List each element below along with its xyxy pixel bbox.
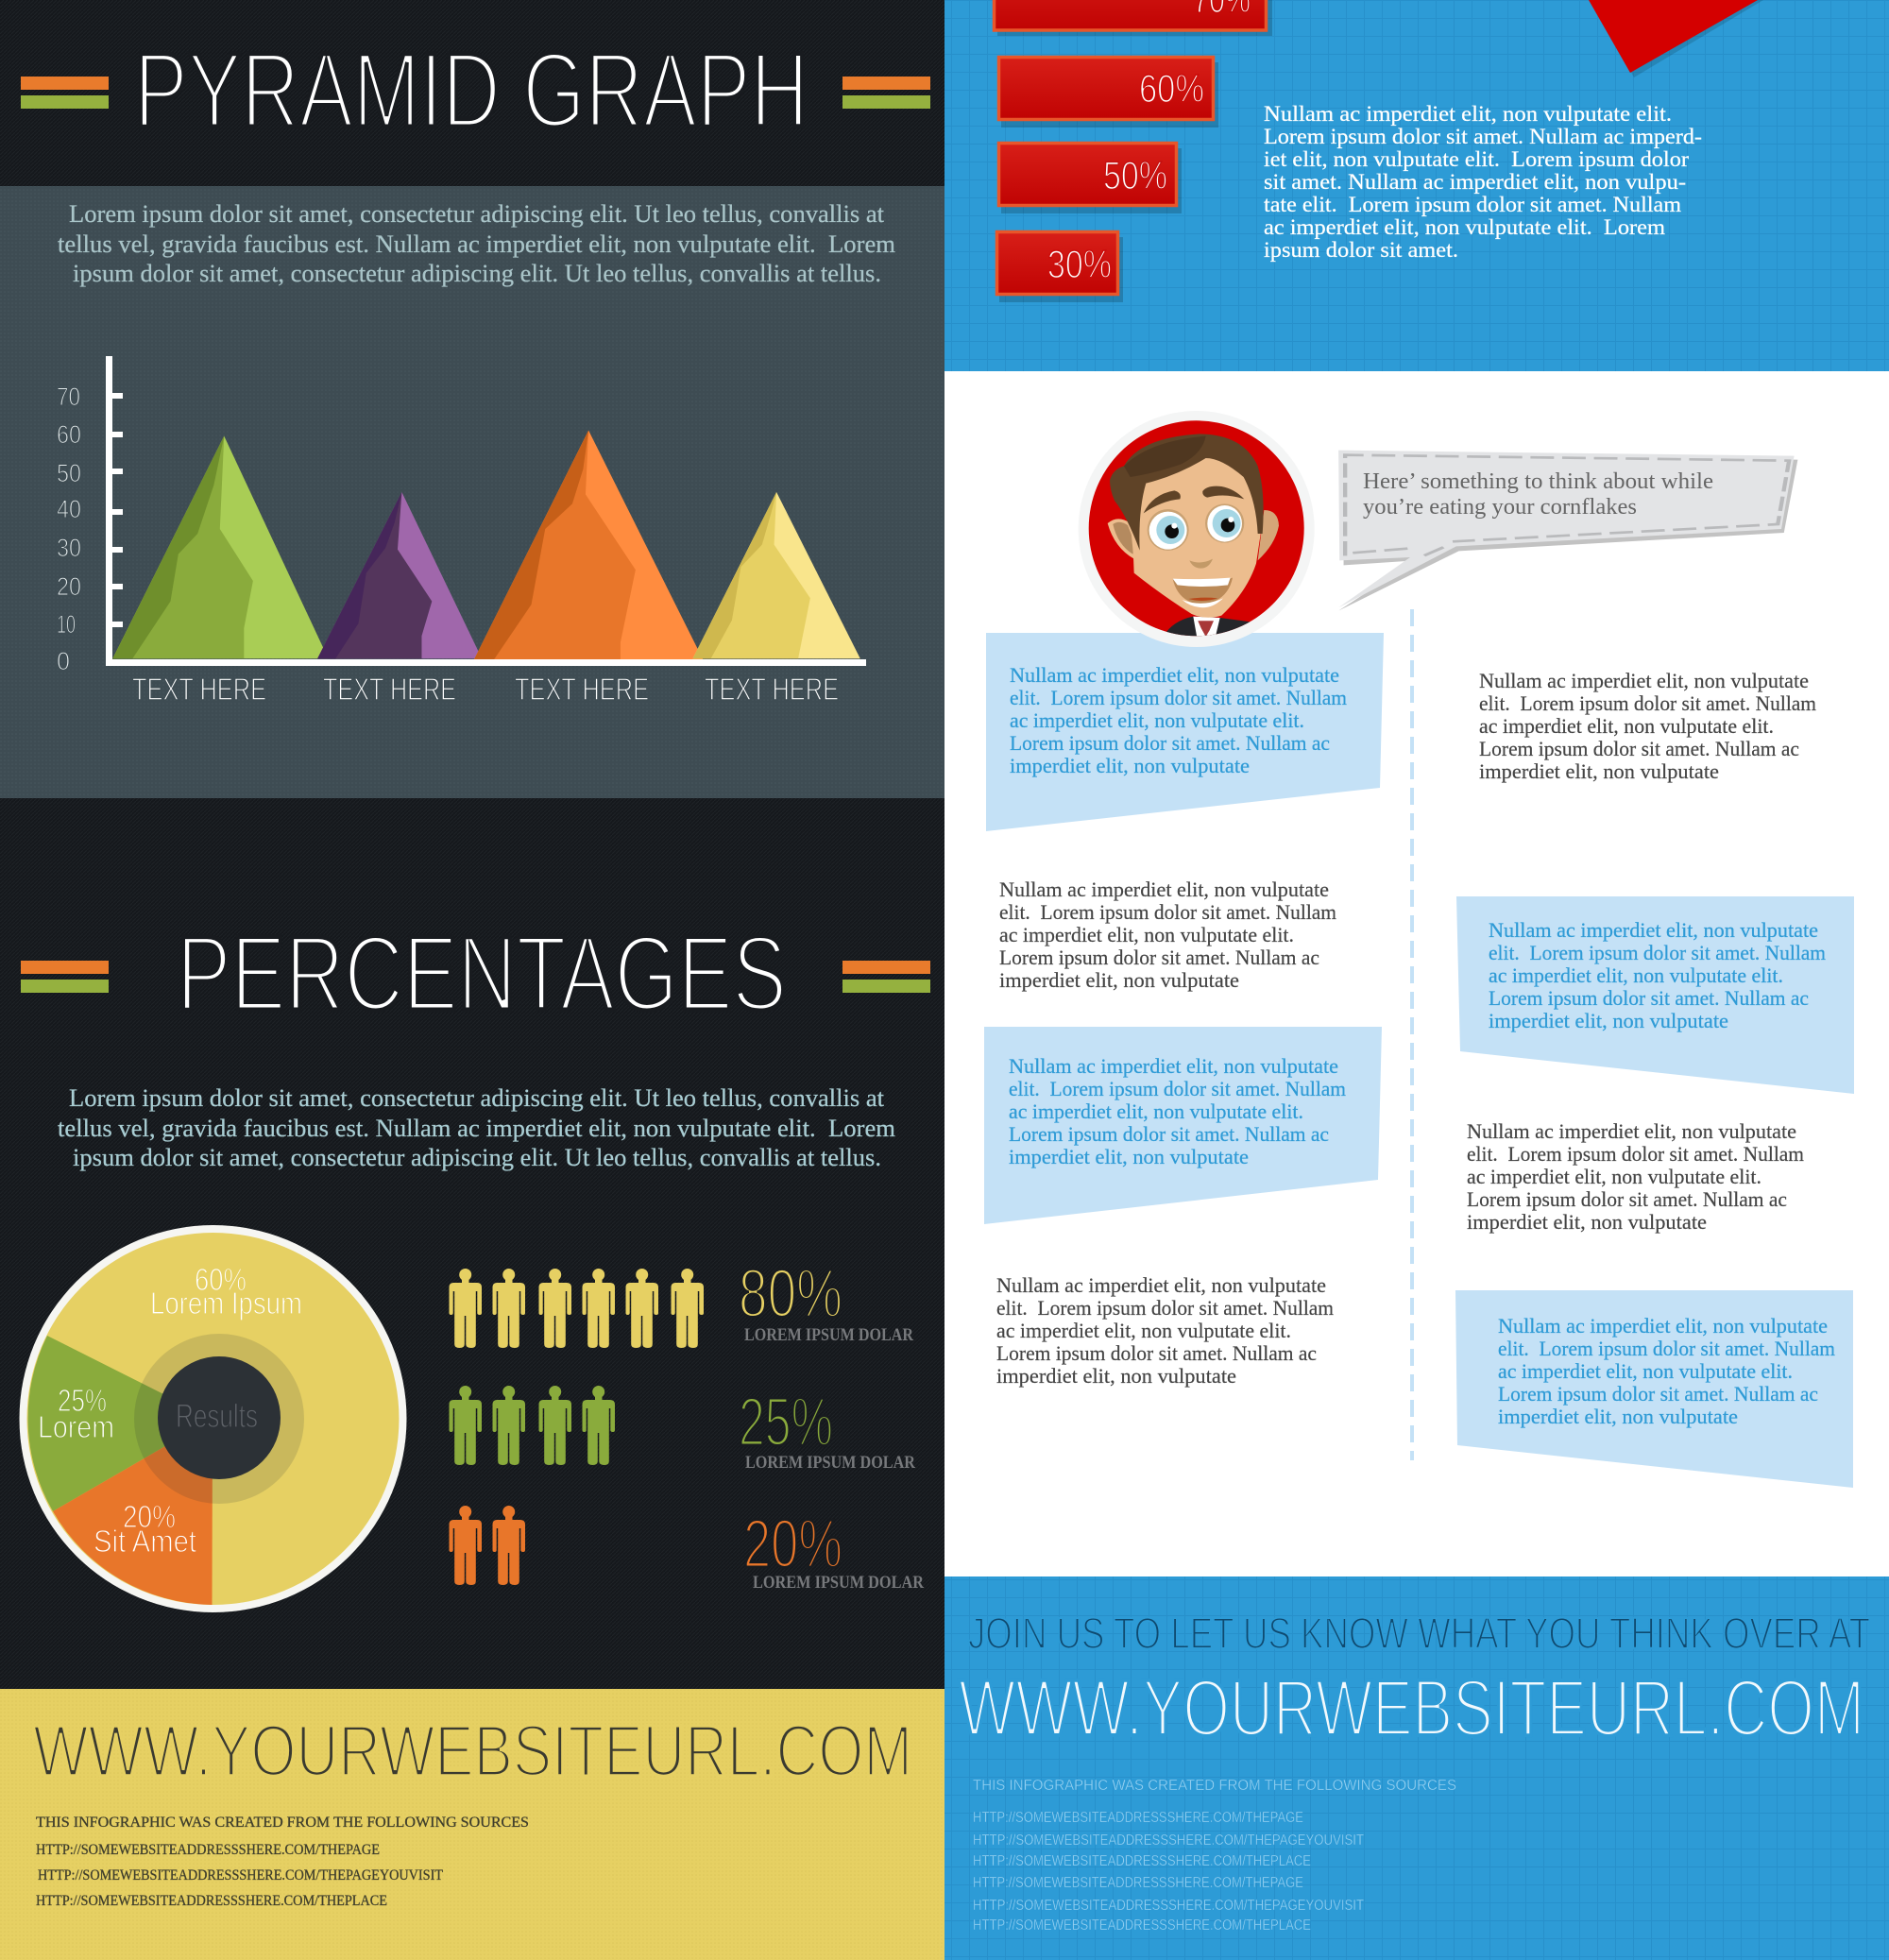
chart: horizontal percentage bars xyxy=(994,0,1272,302)
callout box 4: ac imperdiet elit, non vulputate elit. xyxy=(1498,1359,1793,1383)
callout box 1: Nullam ac imperdiet elit, non vulputate xyxy=(1010,663,1339,687)
text block: left column 2: Lorem ipsum dolor sit amet. Nullam ac xyxy=(996,1341,1317,1365)
footer: website url left: WWW.YOURWEBSITEURL.COM xyxy=(33,1711,912,1792)
text block: right column 2: Nullam ac imperdiet elit, non vulputate xyxy=(1467,1119,1796,1143)
x axis labels xyxy=(132,672,839,707)
bar: 30%: 30% xyxy=(1047,242,1112,286)
wedge: orange 20% xyxy=(53,1419,213,1605)
text block: right column 1: Nullam ac imperdiet elit, non vulputate xyxy=(1479,669,1809,692)
text block: percentages intro: tellus vel, gravida faucibus est. Nullam ac imperdiet elit, non vulputate elit. Lorem xyxy=(58,1115,895,1142)
speech bubble xyxy=(1338,451,1797,611)
bar: 70% xyxy=(994,0,1272,36)
bar: 30% xyxy=(997,232,1123,302)
bar: 60%: 60% xyxy=(1139,66,1204,111)
text block: right column 1: ac imperdiet elit, non vulputate elit. xyxy=(1479,714,1774,738)
text block: right column 1: Lorem ipsum dolor sit amet. Nullam ac xyxy=(1479,737,1799,760)
callout box 4: Nullam ac imperdiet elit, non vulputate xyxy=(1498,1314,1828,1338)
text block: left column 2 xyxy=(996,1273,1334,1388)
callout box 3: Nullam ac imperdiet elit, non vulputate xyxy=(1009,1054,1338,1078)
text block: right column 2: ac imperdiet elit, non vulputate elit. xyxy=(1467,1165,1761,1188)
callout box 3: elit. Lorem ipsum dolor sit amet. Nullam xyxy=(1009,1077,1346,1100)
y axis labels: 50 xyxy=(57,459,81,487)
heading: percentages: PERCENTAGES xyxy=(177,914,787,1032)
avatar: cartoon man in red circle xyxy=(1079,411,1315,647)
text block: left column 2: Nullam ac imperdiet elit, non vulputate xyxy=(996,1273,1326,1297)
stat: 20%: 20% xyxy=(743,1507,842,1582)
stat: 25%: 25% xyxy=(739,1385,833,1460)
footer: sources left: HTTP://SOMEWEBSITEADDRESSSHERE.COM/THEPLACE xyxy=(36,1893,387,1909)
callout box 1 xyxy=(986,633,1384,831)
icons: yellow people row xyxy=(450,1269,704,1348)
callout box 4: elit. Lorem ipsum dolor sit amet. Nullam xyxy=(1498,1337,1835,1360)
wedge: green 25% xyxy=(28,1336,213,1511)
panel: white speech section background xyxy=(944,371,1889,1577)
text block: pyramid intro: tellus vel, gravida faucibus est. Nullam ac imperdiet elit, non vulputate elit. Lorem xyxy=(58,230,895,258)
callout box 4 xyxy=(1455,1290,1853,1488)
callout box 4: imperdiet elit, non vulputate xyxy=(1498,1405,1738,1428)
divider: dashed center line xyxy=(1410,609,1414,1460)
eyebrows xyxy=(1144,490,1181,513)
panel: pyramid graph header xyxy=(0,0,944,186)
footer: sources right xyxy=(973,1778,1456,1934)
callout box 2: elit. Lorem ipsum dolor sit amet. Nullam xyxy=(1489,941,1826,964)
y axis labels: 60 xyxy=(57,420,81,449)
text block: left column 2: elit. Lorem ipsum dolor sit amet. Nullam xyxy=(996,1296,1334,1320)
callout box 3 xyxy=(984,1027,1382,1224)
footer: sources left: THIS INFOGRAPHIC WAS CREATED FROM THE FOLLOWING SOURCES xyxy=(36,1815,529,1831)
icons: green people row xyxy=(450,1386,615,1465)
bar: 50%: 50% xyxy=(1103,153,1167,197)
callout box 3: imperdiet elit, non vulputate xyxy=(1009,1145,1249,1168)
callout box 2: Lorem ipsum dolor sit amet. Nullam ac xyxy=(1489,986,1809,1010)
nose xyxy=(1189,559,1213,569)
footer: sources right: HTTP://SOMEWEBSITEADDRESSSHERE.COM/THEPLACE xyxy=(973,1917,1311,1934)
stat: 80%: LOREM IPSUM DOLAR xyxy=(744,1325,913,1345)
text block: pyramid intro: Lorem ipsum dolor sit amet, consectetur adipiscing elit. Ut leo tellus, convallis at xyxy=(69,200,885,228)
callout box 2: Nullam ac imperdiet elit, non vulputate xyxy=(1489,918,1818,942)
text block: left column 1: ac imperdiet elit, non vulputate elit. xyxy=(999,923,1294,946)
callout box 2: imperdiet elit, non vulputate xyxy=(1489,1009,1728,1032)
pyramid: purple xyxy=(317,492,482,658)
y axis labels: 20 xyxy=(57,572,81,601)
stat: 25% xyxy=(739,1385,915,1473)
panel: percentages background xyxy=(0,798,944,1689)
y axis labels xyxy=(57,383,81,675)
stat: 80%: 80% xyxy=(739,1256,842,1332)
text block: left column 1: elit. Lorem ipsum dolor sit amet. Nullam xyxy=(999,900,1336,924)
text block: left column 1: Nullam ac imperdiet elit, non vulputate xyxy=(999,878,1329,901)
text block: blue panel paragraph: ac imperdiet elit, non vulputate elit. Lorem xyxy=(1264,215,1665,239)
chart: results donut pie: Lorem Ipsum xyxy=(150,1286,302,1321)
stat: 25%: LOREM IPSUM DOLAR xyxy=(745,1453,915,1473)
stat: 80% xyxy=(739,1256,913,1345)
pie slice tip: red wedge xyxy=(1589,0,1763,77)
icons: orange people row xyxy=(450,1506,525,1585)
ears xyxy=(1258,510,1279,560)
text block: left column 1: Lorem ipsum dolor sit amet. Nullam ac xyxy=(999,946,1319,969)
stat: 20%: LOREM IPSUM DOLAR xyxy=(753,1573,924,1593)
panel: blue top right background xyxy=(944,0,1889,371)
text block: percentages intro: ipsum dolor sit amet, consectetur adipiscing elit. Ut leo tellus, convallis at tellus. xyxy=(73,1144,881,1171)
text block: left column 1: imperdiet elit, non vulputate xyxy=(999,968,1239,992)
y axis labels: 30 xyxy=(57,534,81,562)
text block: right column 2 xyxy=(1467,1119,1804,1234)
chart: results donut pie: Results xyxy=(176,1398,258,1435)
callout box 3: ac imperdiet elit, non vulputate elit. xyxy=(1009,1099,1303,1123)
text block: pyramid intro: ipsum dolor sit amet, consectetur adipiscing elit. Ut leo tellus, convallis at tellus. xyxy=(73,260,881,287)
text block: left column 2: imperdiet elit, non vulputate xyxy=(996,1364,1236,1388)
text block: pyramid intro xyxy=(58,200,895,287)
text block: right column 1 xyxy=(1479,669,1816,783)
footer: sources right: HTTP://SOMEWEBSITEADDRESSSHERE.COM/THEPAGEYOUVISIT xyxy=(973,1832,1364,1849)
footer: sources right: THIS INFOGRAPHIC WAS CREATED FROM THE FOLLOWING SOURCES xyxy=(973,1778,1456,1794)
footer: sources left: HTTP://SOMEWEBSITEADDRESSSHERE.COM/THEPAGE xyxy=(36,1842,380,1858)
footer: sources right: HTTP://SOMEWEBSITEADDRESSSHERE.COM/THEPAGE xyxy=(973,1810,1303,1826)
panel: yellow footer background xyxy=(0,1689,944,1960)
text block: blue panel paragraph: Lorem ipsum dolor sit amet. Nullam ac imperd- xyxy=(1264,125,1702,148)
pyramid: green xyxy=(112,436,329,658)
x axis labels: TEXT HERE xyxy=(323,672,456,707)
bar: 50% xyxy=(999,144,1182,213)
x axis labels: TEXT HERE xyxy=(705,672,839,707)
footer: sources right: HTTP://SOMEWEBSITEADDRESSSHERE.COM/THEPAGE xyxy=(973,1875,1303,1891)
chart: results donut pie: Sit Amet xyxy=(94,1524,196,1559)
text block: blue panel paragraph: Nullam ac imperdiet elit, non vulputate elit. xyxy=(1264,102,1672,126)
text block: left column 2: ac imperdiet elit, non vulputate elit. xyxy=(996,1319,1291,1342)
callout box 3: Lorem ipsum dolor sit amet. Nullam ac xyxy=(1009,1122,1329,1146)
bar: 60% xyxy=(999,57,1218,128)
footer: sources right: HTTP://SOMEWEBSITEADDRESSSHERE.COM/THEPLACE xyxy=(973,1853,1311,1869)
text block: right column 1: imperdiet elit, non vulputate xyxy=(1479,759,1719,783)
y axis labels: 70 xyxy=(57,383,80,411)
chart: results donut pie: 25% xyxy=(58,1383,107,1418)
text block: blue panel paragraph: ipsum dolor sit amet. xyxy=(1264,238,1458,262)
heading: pyramid graph: PYRAMID GRAPH xyxy=(134,31,808,149)
callout box 1: Lorem ipsum dolor sit amet. Nullam ac xyxy=(1010,731,1330,755)
callout box 1: imperdiet elit, non vulputate xyxy=(1010,754,1250,777)
mouth xyxy=(1173,578,1233,605)
text block: blue panel paragraph xyxy=(1264,102,1702,262)
text block: percentages intro xyxy=(58,1084,895,1171)
text block: percentages intro: Lorem ipsum dolor sit amet, consectetur adipiscing elit. Ut leo tellus, convallis at xyxy=(69,1084,885,1112)
text block: blue panel paragraph: iet elit, non vulputate elit. Lorem ipsum dolor xyxy=(1264,147,1689,171)
callout box 1: elit. Lorem ipsum dolor sit amet. Nullam xyxy=(1010,686,1347,709)
chart: pyramid graph xyxy=(57,356,866,707)
chart: results donut pie xyxy=(19,1225,406,1612)
panel: pyramid graph chart background xyxy=(0,186,944,798)
text block: right column 2: Lorem ipsum dolor sit amet. Nullam ac xyxy=(1467,1187,1787,1211)
text block: right column 2: elit. Lorem ipsum dolor sit amet. Nullam xyxy=(1467,1142,1804,1166)
footer: sources left: HTTP://SOMEWEBSITEADDRESSSHERE.COM/THEPAGEYOUVISIT xyxy=(38,1867,443,1883)
callout box 2: ac imperdiet elit, non vulputate elit. xyxy=(1489,963,1783,987)
y axis labels: 10 xyxy=(57,610,76,639)
jacket, shirt and tie xyxy=(1166,616,1251,637)
face xyxy=(1131,447,1261,618)
text block: right column 1: elit. Lorem ipsum dolor sit amet. Nullam xyxy=(1479,691,1816,715)
footer: sources right: HTTP://SOMEWEBSITEADDRESSSHERE.COM/THEPAGEYOUVISIT xyxy=(973,1898,1364,1914)
chart: results donut pie: 60% xyxy=(195,1262,247,1297)
text block: blue panel paragraph: sit amet. Nullam ac imperdiet elit, non vulpu- xyxy=(1264,170,1686,194)
chart: results donut pie: Lorem xyxy=(38,1409,114,1444)
text block: left column 1 xyxy=(999,878,1336,992)
x axis labels: TEXT HERE xyxy=(132,672,266,707)
chart: results donut pie: 20% xyxy=(123,1499,176,1534)
eyes xyxy=(1148,509,1189,551)
callout box 4: Lorem ipsum dolor sit amet. Nullam ac xyxy=(1498,1382,1818,1406)
y axis labels: 40 xyxy=(57,495,81,523)
x axis labels: TEXT HERE xyxy=(515,672,649,707)
pyramid: yellow xyxy=(692,492,860,658)
hair xyxy=(1110,434,1264,551)
callout box 2 xyxy=(1456,896,1854,1094)
speech bubble: you’re eating your cornflakes xyxy=(1363,495,1637,520)
pyramid: orange xyxy=(474,431,703,659)
stat: 20% xyxy=(743,1507,924,1593)
chart axes xyxy=(106,356,866,666)
footer: sources left xyxy=(36,1815,529,1909)
y axis labels: 0 xyxy=(57,647,70,675)
text block: blue panel paragraph: tate elit. Lorem ipsum dolor sit amet. Nullam xyxy=(1264,193,1681,216)
speech bubble: Here’ something to think about while xyxy=(1363,469,1713,494)
callout box 1: ac imperdiet elit, non vulputate elit. xyxy=(1010,708,1304,732)
text block: right column 2: imperdiet elit, non vulputate xyxy=(1467,1210,1707,1234)
panel: blue footer background xyxy=(944,1577,1889,1960)
